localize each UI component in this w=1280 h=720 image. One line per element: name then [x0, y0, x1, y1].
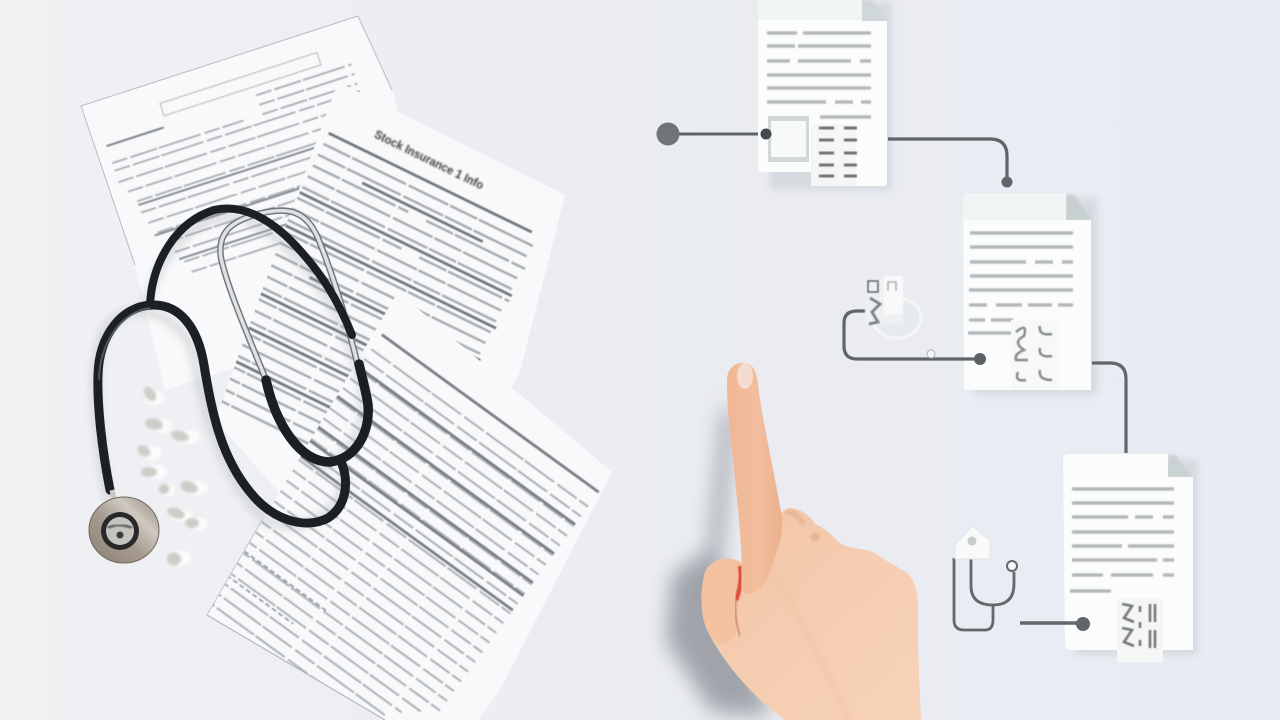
- main tube: [98, 305, 345, 523]
- paper: middle form: [218, 86, 565, 492]
- icon: stethoscope with clipboard: [954, 526, 1017, 630]
- soft shadow: [95, 216, 364, 525]
- hand pointing up: [701, 363, 921, 720]
- small note: [1011, 320, 1059, 388]
- small list: [811, 124, 856, 186]
- fold: [1168, 455, 1192, 478]
- connector: document 2 to document 3: [1092, 363, 1126, 453]
- form heading: Stock Insurance 1 Info: [372, 127, 486, 192]
- hand tendon shading: [772, 570, 850, 720]
- connector: stethoscope mini icon to document 2: [844, 311, 980, 359]
- stethoscope: [89, 208, 368, 566]
- upper tube: [150, 208, 352, 335]
- connector: stethoscope icon to document 3: [1020, 621, 1083, 625]
- palm and fingers: [701, 508, 921, 720]
- shadow: [1068, 459, 1198, 655]
- document 1: [758, 0, 892, 190]
- shadow: [762, 2, 892, 190]
- fold: [1066, 195, 1092, 222]
- text lines: [1070, 489, 1174, 591]
- paper stack: [81, 16, 612, 720]
- metal binaural: [220, 211, 358, 380]
- paper: back form: [80, 16, 398, 390]
- stem: [112, 490, 117, 513]
- pills: [135, 385, 208, 566]
- document 3: [1063, 454, 1198, 662]
- node: [1076, 617, 1090, 631]
- ear loop: [266, 364, 368, 462]
- node: [974, 353, 986, 365]
- flow connector: start to document 1: [656, 122, 765, 146]
- text lines: [968, 233, 1073, 333]
- shadow: [968, 198, 1097, 395]
- icon: mini stethoscope cluster: [865, 276, 921, 338]
- index finger: [727, 363, 782, 594]
- image thumbnail: [768, 116, 809, 162]
- connector: document 1 to document 2: [888, 139, 1012, 188]
- small note: [1117, 598, 1163, 662]
- thumb crease: [736, 566, 741, 600]
- paper: front form: [195, 292, 612, 720]
- knuckles: [786, 512, 804, 524]
- page: [1063, 454, 1193, 650]
- fingernail: [737, 363, 753, 389]
- hand shadow: [666, 400, 770, 716]
- fold: [860, 0, 887, 24]
- thumb: [701, 559, 741, 644]
- page: [758, 0, 887, 186]
- chestpiece: [89, 497, 159, 563]
- text lines: [767, 33, 871, 117]
- page: [963, 193, 1091, 390]
- node: [760, 128, 772, 140]
- document 2: [963, 193, 1097, 395]
